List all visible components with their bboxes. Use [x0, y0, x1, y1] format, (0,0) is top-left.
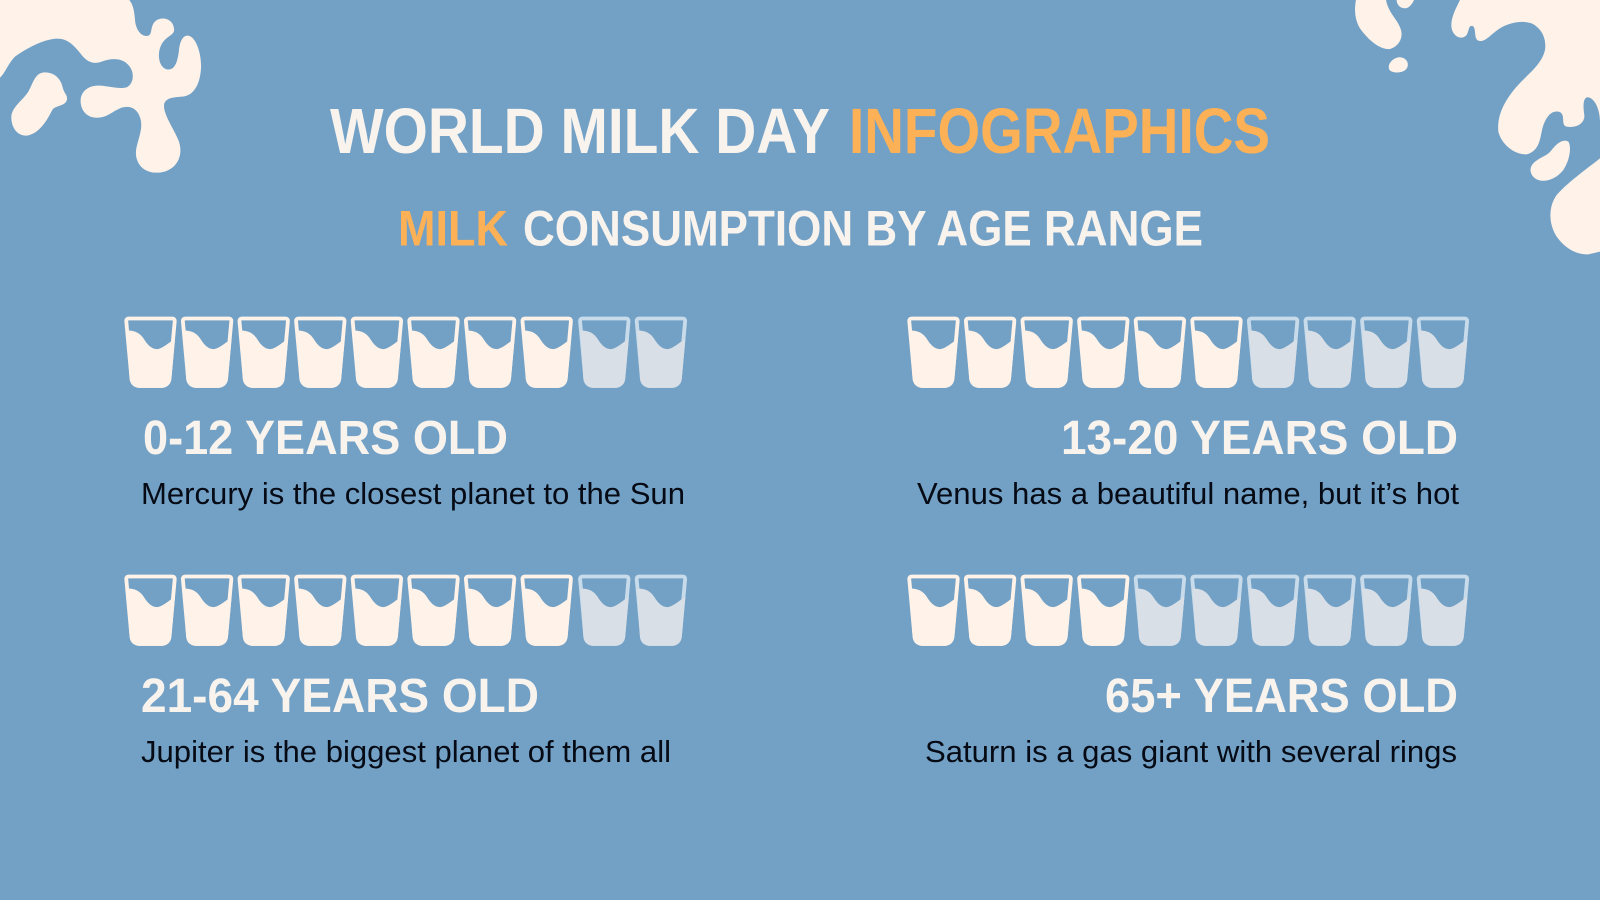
panel: 65+ years old: [909, 576, 1467, 769]
title: WORLD MILK DAY: [330, 95, 830, 167]
heading: 13-20 years old: 13-20 YEARS OLD: [1061, 412, 1458, 465]
milk splash: top right: [1355, 0, 1600, 254]
glass row: 8 of 10 full: [126, 576, 685, 646]
glass row: 4 of 10 full: [909, 576, 1467, 646]
milk splash: top left: [0, 0, 201, 173]
title: INFOGRAPHICS: [849, 95, 1270, 167]
panel: 13-20 years old: [909, 318, 1467, 511]
description: Saturn: Saturn is a gas giant with several rings: [925, 735, 1457, 769]
description: Mercury: Mercury is the closest planet to the Sun: [141, 477, 685, 511]
panel: 0-12 years old: [126, 318, 685, 511]
heading: 65+ years old: 65+ YEARS OLD: [1105, 670, 1458, 723]
subtitle: CONSUMPTION BY AGE RANGE: [523, 200, 1203, 256]
glass row: 6 of 10 full: [909, 318, 1467, 388]
description: Venus: Venus has a beautiful name, but it’s hot: [917, 477, 1460, 511]
title: [330, 95, 1270, 167]
description: Jupiter: Jupiter is the biggest planet of them all: [141, 735, 671, 769]
heading: 21-64 years old: 21-64 YEARS OLD: [141, 670, 539, 723]
glass row: 8 of 10 full: [126, 318, 685, 388]
heading: 0-12 years old: 0-12 YEARS OLD: [143, 412, 508, 465]
subtitle: MILK: [398, 200, 508, 256]
panel: 21-64 years old: [126, 576, 685, 769]
